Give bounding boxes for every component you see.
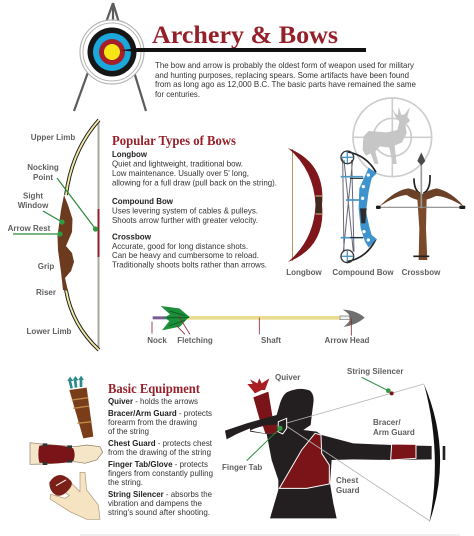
intro text: The bow and arrow is probably the oldest form of weapon used for military: [155, 60, 415, 70]
finger tab pointer: [247, 426, 283, 461]
text: bow types: Compound Bow: [112, 196, 174, 206]
bow anatomy labels: [8, 133, 75, 336]
chest guard: [279, 433, 329, 488]
arrow labels: Fletching: [177, 336, 213, 345]
arrow diagram: [152, 306, 365, 336]
title arrow rule: [121, 48, 366, 52]
text: equipment list: from the drawing of the string: [108, 447, 211, 457]
bow anatomy labels: Nocking: [27, 163, 59, 172]
bowstring: [283, 384, 429, 521]
bow anatomy diagram: [13, 120, 99, 350]
bow anatomy labels: Point: [33, 173, 53, 182]
text: equipment list: [108, 396, 213, 517]
bow anatomy labels: Upper Limb: [31, 133, 75, 142]
bow anatomy labels: Lower Limb: [27, 327, 72, 336]
arrow labels: [147, 336, 370, 345]
archer labels: [222, 367, 415, 495]
lower quiver and arm gap: [250, 425, 277, 433]
icon: finger tab on hand: [49, 472, 100, 519]
text: bow types: Quiet and lightweight, traditional bow.: [112, 158, 243, 168]
text: bow types: Can be heavy and cumbersome to reload.: [112, 250, 259, 260]
string silencer pointer: [362, 377, 394, 395]
nocking point pointer: [57, 178, 98, 232]
text: bow types: [112, 149, 277, 270]
intro text: [155, 60, 416, 99]
text: equipment list: of the string: [108, 426, 149, 436]
sight window pointer: [43, 211, 65, 225]
arrow labels: Nock: [147, 336, 167, 345]
archer labels: Finger Tab: [222, 463, 262, 472]
text: equipment list: vibration and dampens the: [108, 498, 202, 508]
intro text: and hunting purposes, replacing spears. Some artifacts have been found: [155, 70, 409, 80]
heading: popular types of bows: Popular Types of Bows: [112, 133, 236, 148]
archer labels: Guard: [336, 486, 360, 495]
text: equipment list: Bracer/Arm Guard - protects: [108, 408, 212, 418]
archer labels: Bracer/: [373, 418, 401, 427]
archer labels: Arm Guard: [373, 428, 415, 437]
bow type labels: Longbow: [286, 268, 323, 277]
footer faint text line: [80, 534, 460, 536]
bow anatomy labels: Riser: [36, 288, 56, 297]
drawing hand: [278, 418, 287, 434]
bow anatomy labels: Arrow Rest: [8, 224, 51, 233]
intro text: for centuries.: [155, 89, 200, 99]
bow: [424, 384, 440, 523]
bow anatomy labels: Sight: [23, 192, 43, 200]
intro text: from as long ago as 12,000 B.C. The basic parts have remained the same: [155, 79, 416, 89]
bow anatomy labels: Grip: [38, 262, 54, 271]
icon: quiver: [67, 376, 93, 438]
bow type labels: [286, 268, 441, 277]
arm bracer: [391, 444, 416, 460]
text: bow types: Crossbow: [112, 232, 152, 242]
icon: compound bow: [341, 151, 377, 263]
icon: longbow: [288, 148, 322, 262]
arrow rest pointer: [13, 231, 63, 237]
archer silhouette: [225, 389, 432, 518]
bow anatomy labels: Window: [18, 201, 49, 210]
text: equipment list: Finger Tab/Glove - protects: [108, 459, 208, 469]
text: equipment list: forearm from the drawing: [108, 417, 197, 427]
title: Archery & Bows: [152, 20, 338, 49]
text: bow types: Traditionally shoots bolts rather than arrows.: [112, 260, 267, 270]
bow type labels: Compound Bow: [332, 268, 394, 277]
icon: target on tripod: [74, 3, 146, 111]
bow type labels: Crossbow: [402, 268, 441, 277]
quiver on back: [247, 378, 275, 433]
icon: deer in scope: [353, 98, 432, 177]
arrow labels: Arrow Head: [325, 336, 370, 345]
text: bow types: Shoots arrow further with greater velocity.: [112, 215, 258, 225]
heading: basic equipment: Basic Equipment: [108, 381, 200, 396]
archer labels: Quiver: [275, 373, 300, 382]
text: bow types: Longbow: [112, 149, 148, 159]
text: bow types: Accurate, good for long distance shots.: [112, 241, 248, 251]
archer labels: Chest: [336, 476, 359, 485]
text: equipment list: String Silencer - absorbs the: [108, 489, 212, 499]
text: equipment list: the string.: [108, 477, 143, 487]
text: equipment list: string's sound after shooting.: [108, 507, 210, 517]
text: bow types: allowing for a full draw (pull back on the string).: [112, 178, 277, 188]
archer labels: String Silencer: [347, 367, 403, 376]
text: bow types: Low maintenance. Usually over 5' long,: [112, 168, 249, 178]
text: bow types: Uses levering system of cables & pulleys.: [112, 206, 258, 216]
text: equipment list: Quiver - holds the arrows: [108, 396, 198, 406]
text: equipment list: Chest Guard - protects chest: [108, 438, 213, 448]
archer illustration: [225, 377, 445, 523]
text: equipment list: fingers from constantly pulling: [108, 468, 213, 478]
icon: bracer on forearm: [30, 443, 103, 465]
icon: crossbow: [376, 152, 465, 260]
arrow labels: Shaft: [261, 336, 281, 345]
